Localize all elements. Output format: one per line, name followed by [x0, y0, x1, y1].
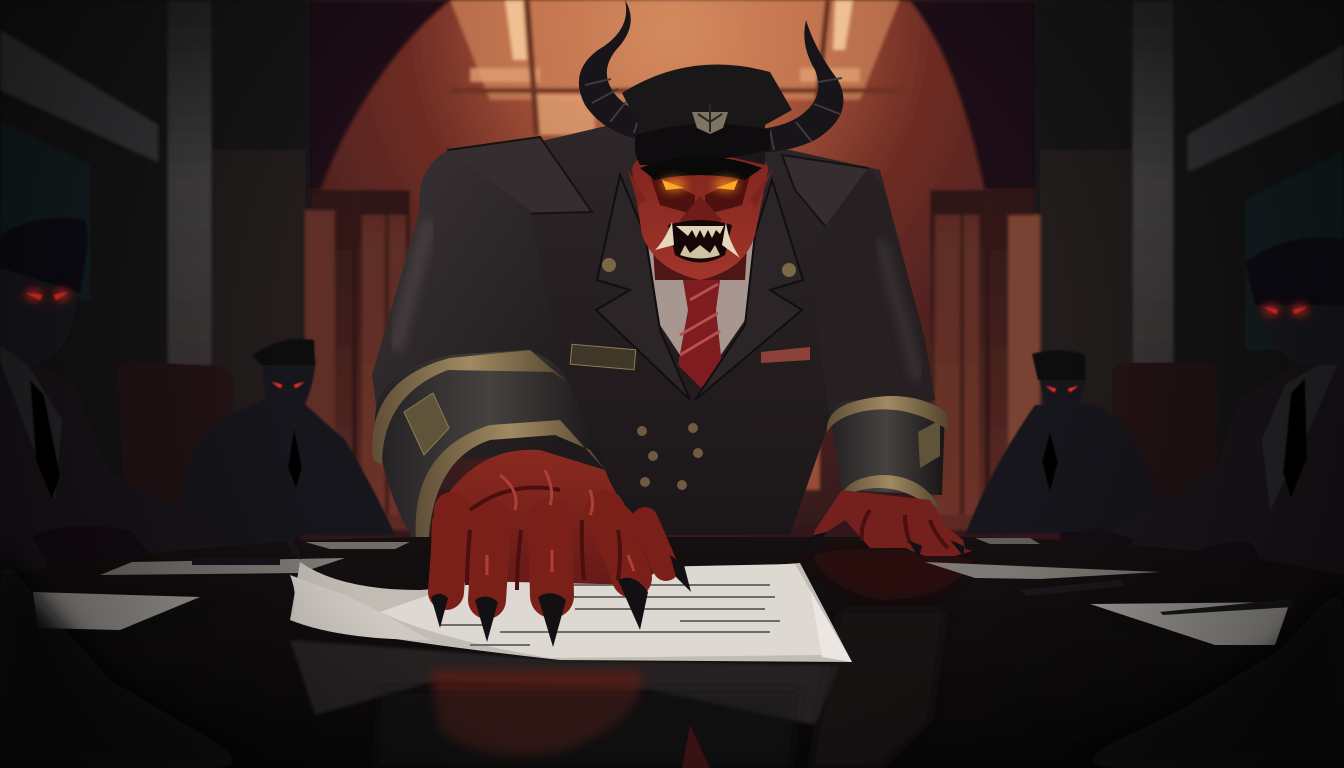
background: right arch	[910, 0, 1060, 190]
demon: lapels	[596, 175, 803, 400]
demon: collar pins and badges	[570, 258, 810, 370]
demon: left clawed hand	[430, 450, 670, 600]
demon: left arm sleeve	[372, 150, 590, 470]
officer: far right seated	[965, 350, 1162, 535]
eye glow	[26, 179, 1308, 315]
demon: right clawed hand	[808, 490, 977, 558]
officer: near left	[0, 218, 302, 590]
background: glowing ceiling window	[450, 0, 900, 490]
officer: far left seated	[178, 339, 395, 535]
demon: left horn	[579, 0, 670, 142]
demon: shoulder epaulettes	[448, 137, 878, 232]
chair: left	[118, 361, 233, 520]
demon: left armband	[372, 350, 605, 552]
foreground: dark silhouettes at corners	[0, 545, 1344, 768]
background: left wall and pillars	[0, 0, 335, 530]
background: left arch	[240, 0, 450, 190]
demon: right armband	[827, 396, 948, 507]
table: reflections	[290, 549, 975, 768]
demon: right arm sleeve	[815, 168, 935, 415]
officer: near right	[1045, 238, 1344, 590]
demon: torso coat	[380, 125, 935, 535]
demon: face	[628, 148, 772, 280]
demon: right horn	[740, 20, 843, 152]
demon: neck	[650, 200, 750, 280]
demon: cap	[622, 65, 792, 180]
demon: coat buttons	[637, 423, 703, 490]
background: right wall and pillars	[1008, 0, 1344, 530]
table: glossy surface	[0, 537, 1344, 768]
demon: shirt and tie	[645, 225, 755, 388]
chair: right	[1112, 362, 1217, 510]
demon: claws	[431, 555, 691, 647]
document: central contract	[290, 562, 852, 662]
table: small documents and pens	[33, 468, 1293, 660]
